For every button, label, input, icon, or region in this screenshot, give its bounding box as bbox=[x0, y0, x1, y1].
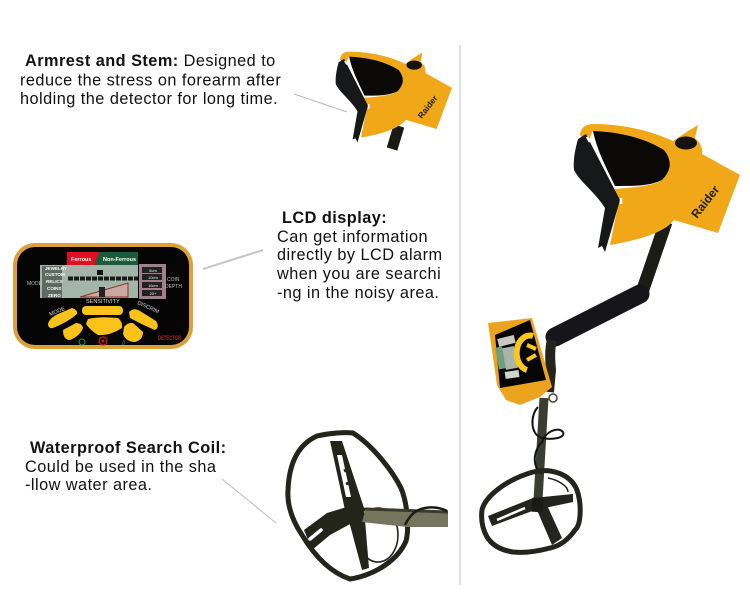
text: armrest and stem: reduce the stress on forearm after bbox=[20, 72, 281, 90]
panel: LCD control box: DEPTH bbox=[165, 284, 182, 290]
text: LCD display: LCD display: bbox=[282, 209, 387, 227]
display: LCD screen bbox=[40, 265, 138, 298]
text: LCD display: -ng in the noisy area. bbox=[277, 284, 439, 302]
icon: search coil close-up bbox=[288, 433, 448, 579]
panel: LCD control box: DISCRIM bbox=[136, 300, 160, 315]
icon: lower shaft and cable bbox=[532, 340, 563, 500]
panel: LCD control box: MODE bbox=[27, 281, 43, 287]
indicator: ferrous banner: Ferrous bbox=[71, 257, 91, 263]
pointer: armrest bbox=[294, 94, 347, 112]
text: armrest and stem bbox=[20, 52, 281, 108]
panel: LCD control box: // bbox=[122, 341, 126, 347]
icon: control box of detector bbox=[488, 318, 552, 405]
panel: LCD control box: MODE bbox=[49, 306, 66, 318]
text: LCD display: directly by LCD alarm bbox=[277, 246, 442, 264]
pointer: search coil bbox=[222, 479, 276, 523]
indicator: ferrous banner: Non-Ferrous bbox=[103, 257, 136, 263]
text: armrest and stem: holding the detector for long time. bbox=[20, 90, 278, 108]
brand label: Raider bbox=[688, 183, 723, 221]
display: coin depth: 6cm bbox=[149, 268, 157, 273]
display: LCD screen: COINS bbox=[47, 286, 62, 291]
panel: LCD control box: DETECTOR bbox=[158, 336, 181, 342]
display: coin depth: 10cm bbox=[148, 275, 159, 280]
text: waterproof search coil: Waterproof Search Coil: bbox=[30, 439, 227, 457]
pointer: LCD display bbox=[203, 250, 263, 269]
icon: armrest close-up: Raider bbox=[416, 93, 440, 120]
icon: armrest stem of detector bbox=[640, 222, 666, 298]
panel: LCD control box bbox=[13, 243, 193, 349]
display: LCD screen: ZERO bbox=[48, 293, 61, 298]
icon: search coil of detector bbox=[482, 471, 580, 552]
display: LCD screen: RELICS bbox=[46, 279, 63, 284]
panel: LCD control box: COIN bbox=[167, 277, 180, 283]
icon: foam grip bbox=[555, 294, 640, 337]
display: LCD screen: CUSTOM bbox=[45, 272, 65, 277]
text: LCD display: when you are searchi bbox=[276, 265, 441, 283]
text: waterproof search coil bbox=[25, 439, 227, 494]
text: LCD display: Can get information bbox=[277, 228, 428, 246]
icon: armrest close-up bbox=[336, 52, 452, 143]
text: LCD display bbox=[276, 209, 442, 302]
indicator: ferrous banner bbox=[67, 252, 138, 267]
display: coin depth: 16cm bbox=[148, 283, 159, 288]
text: waterproof search coil: -llow water area. bbox=[25, 476, 152, 494]
buttons bbox=[48, 306, 158, 342]
text: armrest and stem: Armrest and Stem: Designed to bbox=[25, 52, 276, 70]
icon: armrest stem close-up bbox=[392, 126, 399, 149]
icon: armrest of detector bbox=[574, 124, 740, 252]
display: coin depth: 20+ bbox=[150, 291, 157, 296]
display: coin depth bbox=[139, 264, 166, 299]
panel: LCD control box: SENSITIVITY bbox=[86, 299, 120, 305]
display: LCD screen: JEWELRY bbox=[45, 266, 67, 271]
text: waterproof search coil: Could be used in the sha bbox=[25, 458, 217, 476]
